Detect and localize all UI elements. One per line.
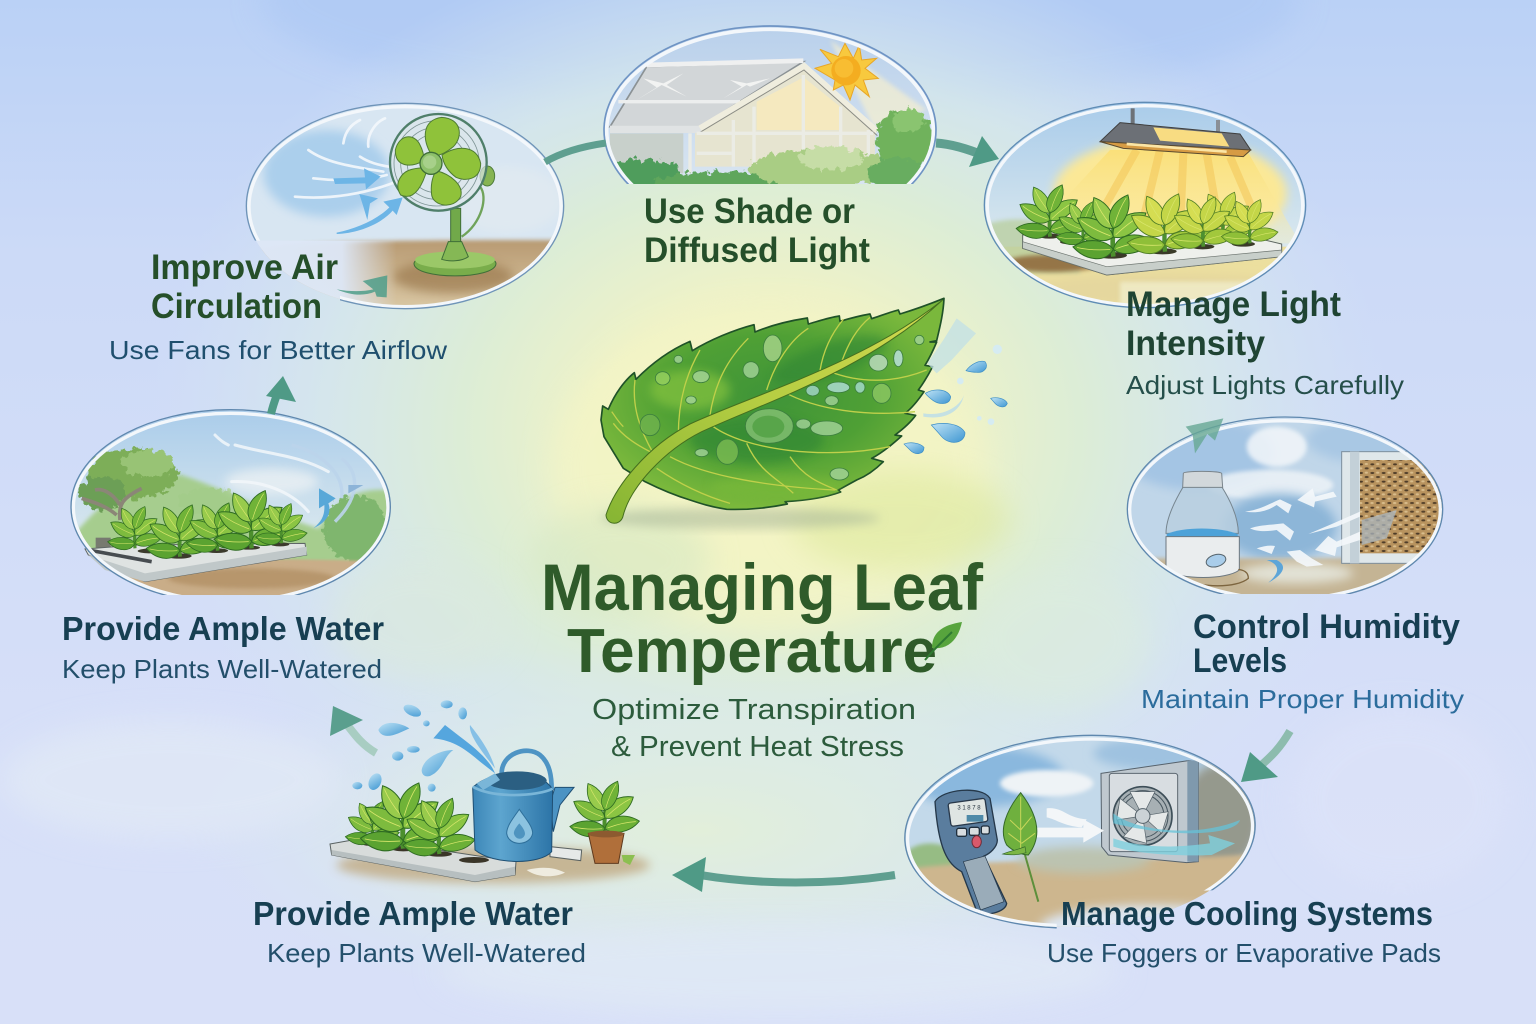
leaf blade	[601, 298, 944, 509]
panel: watering can scene (Provide Ample Water)	[330, 700, 650, 883]
icon: humidifier	[1166, 471, 1248, 586]
mist arrows	[1245, 488, 1360, 567]
title: Temperature	[567, 617, 937, 686]
text: manage light intensity: Intensity	[1126, 324, 1266, 363]
text: improve air circulation: Use Fans for Better Airflow	[109, 335, 447, 365]
panel: fan vignette (Improve Air Circulation)	[240, 100, 573, 314]
icon: handheld thermometer	[935, 790, 1007, 914]
text: manage cooling systems	[1047, 895, 1441, 968]
icon: plant tray	[1015, 182, 1282, 275]
bushes	[607, 108, 933, 192]
icon: desk fan	[390, 114, 496, 276]
text: control humidity: Maintain Proper Humidity	[1141, 684, 1464, 714]
text: use shade	[644, 192, 870, 270]
air flow arrows	[1035, 808, 1240, 855]
arrow: cooling to watering	[672, 857, 895, 892]
bottom-left text fade	[259, 240, 393, 304]
text: provide ample water bottom: Provide Ample Water	[253, 895, 573, 932]
icon: plant tray	[85, 487, 308, 582]
arrow: teal small wind arrow	[337, 275, 387, 297]
arrow: humidity to cooling	[1241, 731, 1290, 782]
text: improve air circulation	[109, 248, 447, 365]
text: provide ample water left: Keep Plants Well-Watered	[62, 654, 382, 684]
text: provide ample water bottom	[253, 895, 586, 968]
arrow: watering to plants	[330, 706, 376, 753]
leaf shading	[650, 326, 892, 498]
text: manage cooling systems: Manage Cooling Systems	[1061, 895, 1433, 932]
arrow: up-left toward grow light	[1186, 418, 1223, 453]
panel: outdoor plants vignette (Provide Ample Water)	[70, 409, 391, 595]
text: control humidity	[1141, 608, 1464, 714]
text: provide ample water bottom: Keep Plants Well-Watered	[267, 938, 586, 968]
text: use shade: Diffused Light	[644, 231, 870, 270]
icon: sun	[815, 43, 878, 100]
greenhouse walls	[610, 133, 683, 173]
panel: cooling system vignette (Manage Cooling Systems)	[904, 734, 1256, 928]
leaf midrib	[606, 300, 943, 523]
icon: water splash	[352, 700, 495, 792]
arrow: greenhouse to grow light	[936, 136, 999, 167]
title	[541, 550, 984, 686]
greenhouse roof panels	[610, 62, 803, 127]
text: manage light intensity: Manage Light	[1126, 285, 1341, 324]
panel: humidifier vignette (Control Humidity Levels)	[1126, 416, 1444, 594]
leaf droplets	[640, 335, 924, 480]
text: improve air circulation: Circulation	[151, 287, 322, 326]
subtitle	[592, 694, 916, 763]
text: improve air circulation: Improve Air	[151, 248, 338, 287]
icon: AC unit	[1101, 761, 1198, 863]
wind streaks	[295, 118, 397, 198]
text: manage light intensity	[1126, 285, 1404, 400]
icon: handheld thermometer: 3 1 8 7 8	[957, 805, 981, 811]
text: provide ample water left	[62, 610, 384, 684]
icon: potted plant	[569, 778, 641, 865]
blowing water drops	[927, 318, 976, 373]
leaf veins	[612, 317, 927, 503]
text: provide ample water left: Provide Ample Water	[62, 610, 384, 647]
text: manage cooling systems: Use Foggers or Evaporative Pads	[1047, 938, 1441, 968]
cooling pad	[1341, 451, 1418, 564]
panel: greenhouse vignette (Use Shade or Diffused Light)	[603, 25, 937, 184]
arrow: fan to greenhouse	[545, 143, 606, 162]
panel: grow light vignette (Manage Light Intensity)	[980, 100, 1313, 315]
subtitle: & Prevent Heat Stress	[611, 731, 904, 763]
icon: hanging lamp	[1100, 108, 1251, 157]
icon: watering can	[473, 751, 574, 861]
subtitle: Optimize Transpiration	[592, 694, 916, 726]
icon: small leaf	[1003, 793, 1038, 902]
title: Managing Leaf	[541, 550, 984, 624]
arrow: plants to fan	[266, 376, 296, 414]
icon: central leaf with droplets	[600, 298, 1007, 529]
text: use shade: Use Shade or	[644, 192, 855, 231]
icon: small title leaf	[925, 622, 962, 660]
text: control humidity: Levels	[1193, 642, 1287, 680]
text: manage light intensity: Adjust Lights Carefully	[1126, 370, 1404, 400]
icon: plant tray	[330, 779, 516, 882]
rim	[1127, 417, 1443, 602]
text: control humidity: Control Humidity	[1193, 608, 1460, 646]
